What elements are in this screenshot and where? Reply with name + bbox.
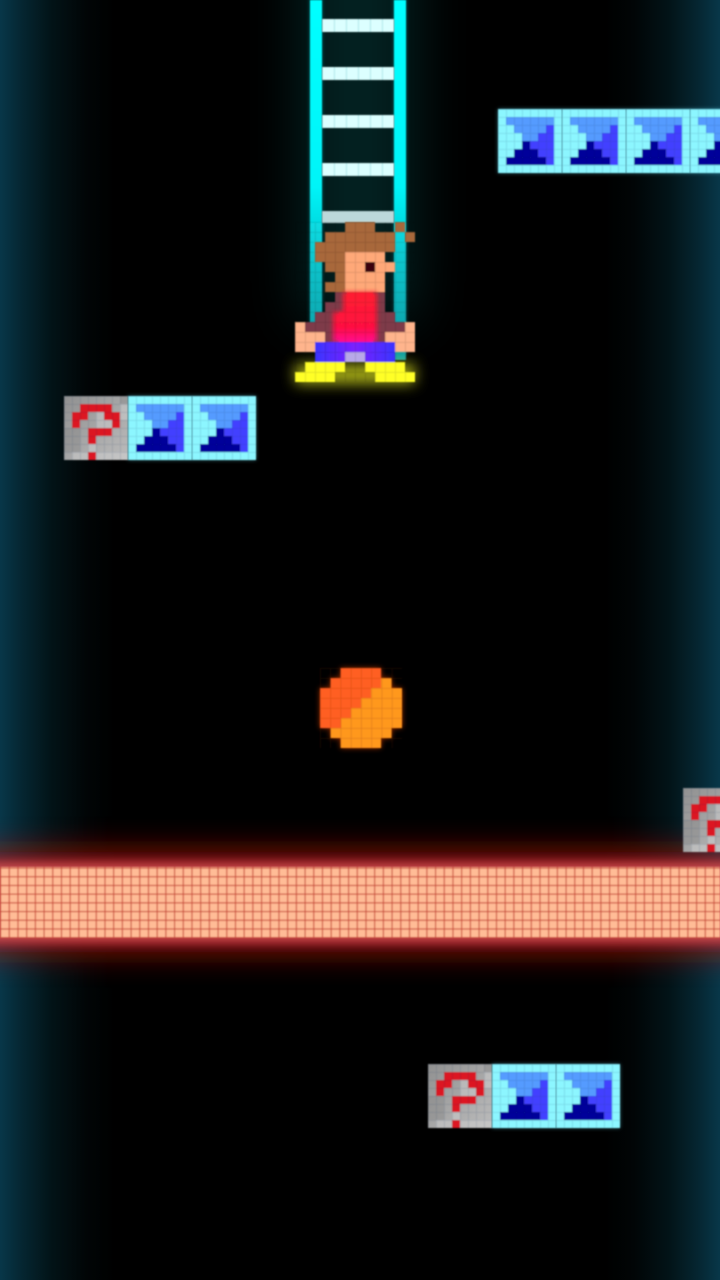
shirt (333, 292, 377, 342)
shirt sleeves (305, 292, 405, 342)
face (345, 252, 395, 292)
fireball (320, 668, 402, 748)
blue blocks top right (498, 109, 720, 173)
eye (365, 262, 375, 272)
platform left: question block and two blue blocks (64, 396, 256, 460)
hands (295, 322, 415, 352)
player character (295, 222, 415, 384)
shoes (295, 362, 415, 382)
platform bottom: question block and two blue blocks (428, 1064, 620, 1128)
shoe glow (295, 364, 415, 384)
ladder (300, 0, 416, 360)
ladder rails (310, 0, 406, 360)
hair (315, 222, 415, 292)
lava bar (0, 852, 720, 952)
question block right edge (683, 788, 720, 852)
ladder rungs (322, 19, 394, 223)
trousers (315, 342, 395, 362)
